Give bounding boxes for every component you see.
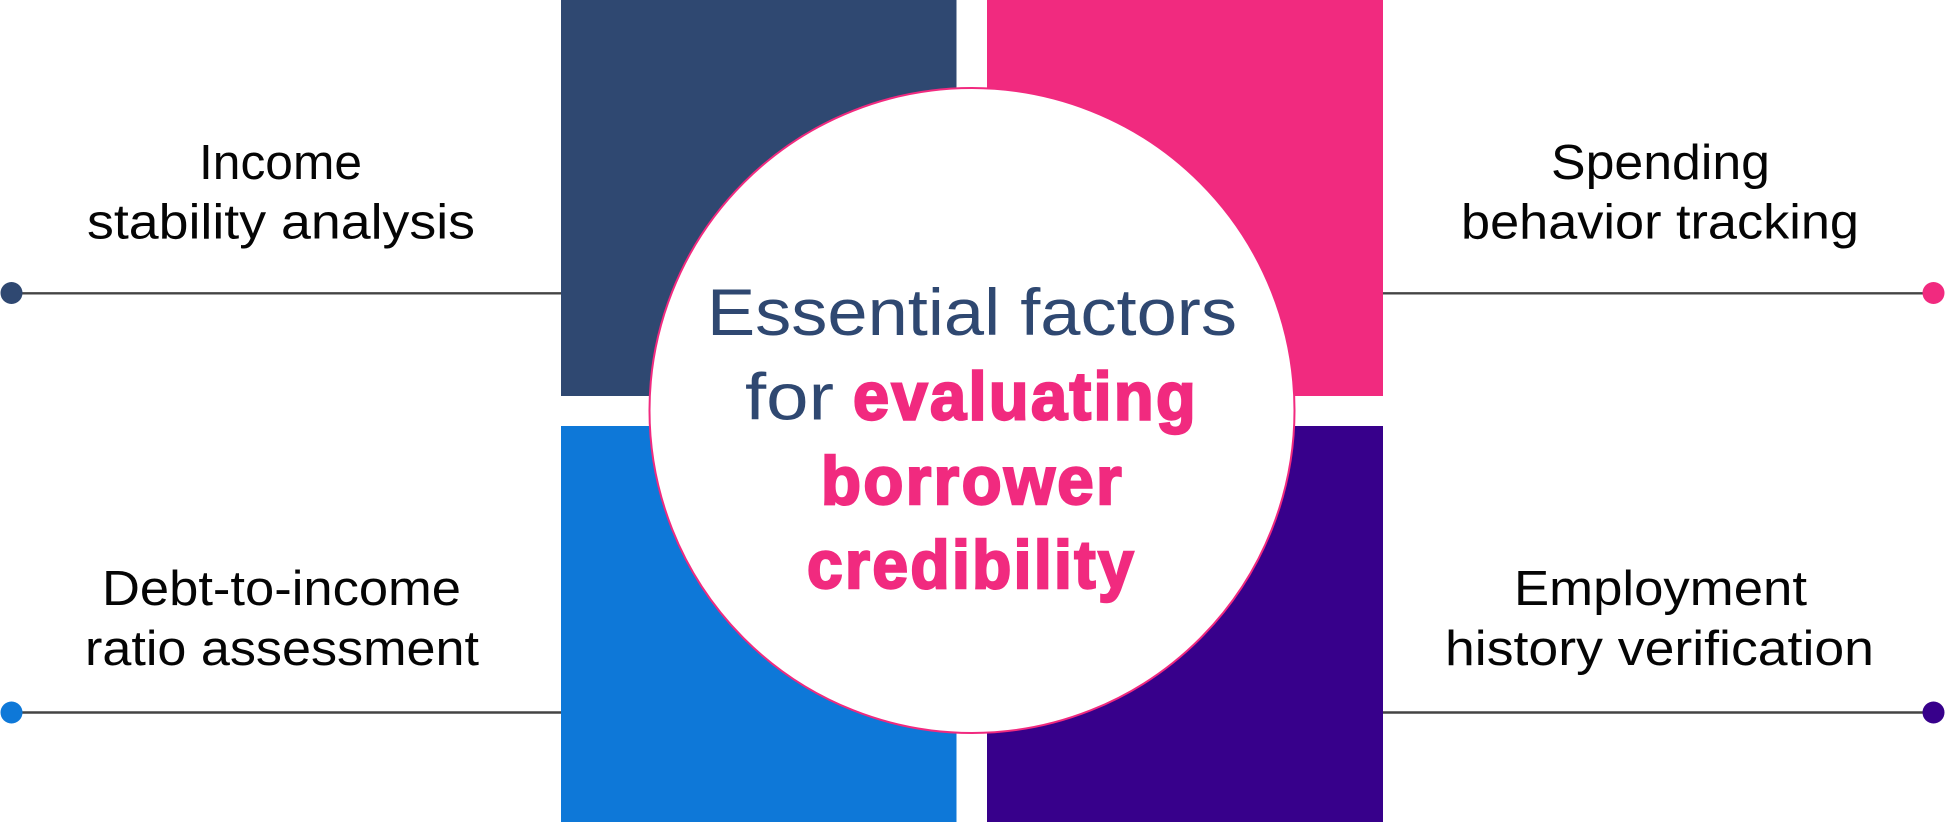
label: debt-to-income ratio assessment: Debt-to-income [102,562,461,616]
panel: top-left navy square [561,0,956,396]
label: debt-to-income ratio assessment [85,562,479,676]
title: Essential factors [707,275,1237,349]
connector: spending behavior [1383,282,1944,304]
label: spending behavior tracking [1461,136,1859,250]
panel: top-right pink square [987,0,1383,396]
label: employment history verification [1445,562,1874,676]
label: employment history verification: Employment [1514,562,1807,616]
title: for [745,360,834,434]
panel: bottom-left blue square [561,426,956,822]
label: spending behavior tracking: behavior tracking [1461,196,1859,250]
label: spending behavior tracking: Spending [1551,136,1770,190]
title: credibility [807,527,1136,603]
label: debt-to-income ratio assessment: ratio assessment [85,622,479,676]
title [707,275,1237,603]
label: income stability analysis: Income [199,136,362,190]
title: evaluating [853,358,1198,434]
label: income stability analysis [87,136,475,250]
connector: employment history [1383,702,1944,724]
panel: bottom-right purple square [987,426,1383,822]
label: income stability analysis: stability analysis [87,196,475,250]
title: borrower [821,443,1124,519]
connector: income stability [0,282,561,304]
label: employment history verification: history verification [1445,622,1874,676]
center circle [650,88,1294,733]
connector: debt-to-income [0,702,561,724]
